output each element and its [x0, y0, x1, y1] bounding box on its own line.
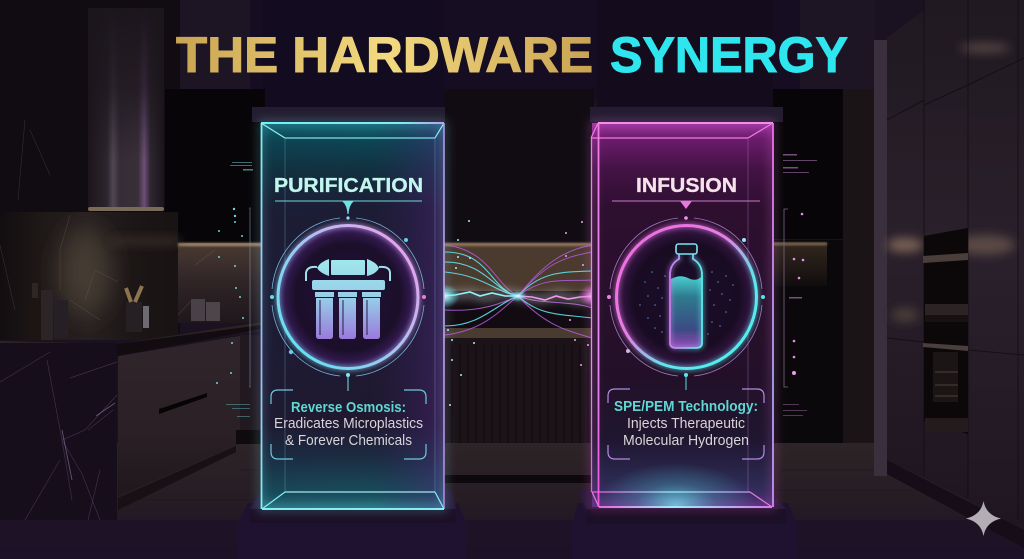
lower floor shade: [0, 520, 1024, 559]
bottles and utensils: [28, 283, 220, 340]
heading: the hardware synergy: THE HARDWARE: [176, 27, 593, 83]
range hood: [88, 8, 164, 211]
description: reverse osmosis: Reverse Osmosis:: [291, 399, 406, 416]
description: SPE/PEM technology: Injects Therapeutic: [627, 415, 745, 432]
energy connection between panels: [428, 220, 610, 406]
glass box: infusion: [591, 123, 773, 547]
description: SPE/PEM technology: [614, 398, 758, 449]
tall cabinets: [887, 0, 1024, 530]
connector under badge: [347, 375, 349, 391]
right flare: [578, 284, 610, 308]
ovens: [923, 228, 968, 434]
base cabinets: [118, 336, 240, 496]
floor: [0, 443, 1024, 559]
particles: [447, 220, 589, 406]
center flare: [509, 290, 527, 302]
particles around bottle: [639, 271, 734, 335]
left flare: [428, 284, 460, 308]
panel: infusion: [572, 107, 798, 559]
title divider and drop: [612, 201, 760, 220]
description: SPE/PEM technology: SPE/PEM Technology:: [614, 398, 758, 415]
radiator slats: [452, 345, 588, 472]
HUD: left data readouts: [216, 162, 253, 417]
glowing bolt halo: [440, 293, 596, 300]
connector under badge: [685, 375, 687, 390]
circular badge: bottle: [607, 218, 765, 377]
text bracket: [271, 390, 426, 459]
marble veins on backsplash: [0, 120, 215, 320]
description: reverse osmosis: & Forever Chemicals: [285, 432, 412, 449]
panel title: purification: PURIFICATION: [274, 174, 423, 197]
description: reverse osmosis: [274, 399, 423, 449]
title divider and drop: [275, 201, 422, 220]
description: SPE/PEM technology: Molecular Hydrogen: [623, 432, 749, 449]
icon: sparkle watermark: [966, 501, 1001, 536]
pedestal: infusion: [572, 107, 798, 559]
glass box: purification: [261, 123, 444, 509]
marble island: [0, 343, 117, 520]
wall post: [874, 40, 887, 476]
icon: reverse osmosis filter: [306, 259, 390, 339]
HUD: right data readouts: [783, 154, 817, 416]
cyan bolt: [440, 292, 518, 296]
baseboard: [887, 460, 1024, 548]
magenta bolt: [518, 296, 596, 300]
fan of violet curves: [445, 245, 592, 338]
stone countertop: [0, 322, 262, 354]
panel title: infusion: INFUSION: [636, 174, 737, 197]
circular badge: filter: [270, 218, 426, 377]
icon: hydrogen water bottle: [670, 244, 702, 348]
fan of cyan curves: [445, 252, 592, 326]
text bracket: [608, 389, 764, 459]
panel: purification: [238, 107, 466, 559]
heading: the hardware synergy: SYNERGY: [610, 27, 848, 83]
pedestal: purification: [238, 107, 466, 559]
description: reverse osmosis: Eradicates Microplastics: [274, 415, 423, 432]
heading: the hardware synergy: [176, 27, 848, 83]
